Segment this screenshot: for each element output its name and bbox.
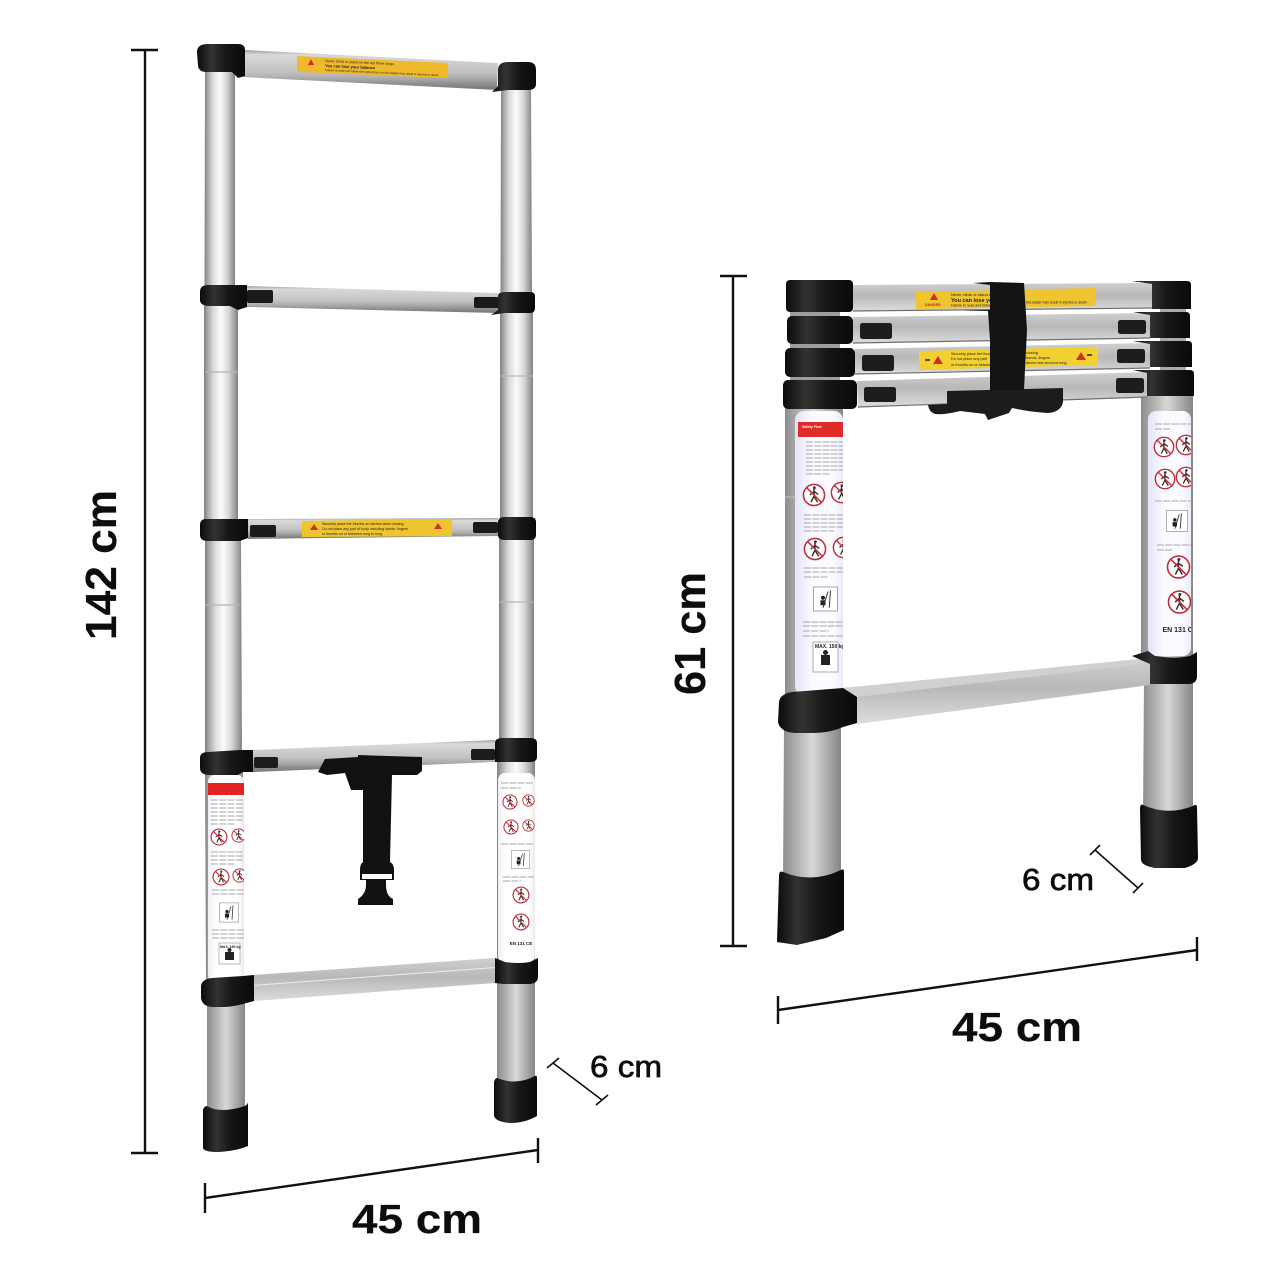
right stile bbox=[497, 85, 535, 1090]
strap and buckle bbox=[318, 755, 422, 905]
left collars bbox=[197, 44, 254, 1007]
lower left collar bbox=[778, 688, 857, 733]
middle warning label: Do not place any part bbox=[951, 357, 988, 361]
left sticker bbox=[795, 411, 843, 692]
dimension: depth 6 cm folded: 6 cm bbox=[1022, 862, 1094, 897]
middle warning label: closing bbox=[1026, 351, 1038, 355]
upper right stile bbox=[1141, 392, 1193, 657]
rung 3 with warning label: Securely place the thumbs on latches when closing bbox=[322, 522, 404, 526]
dimension: height 61 cm: 61 cm bbox=[666, 572, 715, 695]
stacked rungs bbox=[853, 283, 1152, 407]
right sticker bbox=[498, 773, 535, 963]
upper warning label: DANGER bbox=[925, 303, 941, 307]
extended ladder illustration bbox=[197, 44, 538, 1152]
rung 4 bbox=[253, 740, 495, 772]
left sticker: MAX. 150 kg bbox=[220, 945, 241, 949]
middle warning label: above last secured rung bbox=[1026, 361, 1067, 365]
dimension: height 61 cm bbox=[666, 276, 747, 946]
left sticker bbox=[208, 775, 246, 982]
lower right collar bbox=[1132, 651, 1197, 684]
upper warning label: Never climb or stand on bbox=[951, 292, 993, 297]
upper warning label: Failure to read and follow bbox=[951, 304, 992, 308]
middle warning label: Securely place the thumbs bbox=[951, 352, 996, 356]
left stacked caps bbox=[783, 280, 857, 409]
upper warning label: You can lose your balance bbox=[951, 298, 1020, 304]
right collars bbox=[491, 62, 538, 984]
rung 1 with warning label: Never climb or stand on the top three rungs bbox=[325, 59, 394, 66]
right sticker: EN 131 CE bbox=[1162, 627, 1198, 634]
rung 1 with warning label bbox=[243, 50, 498, 90]
strap and handle bbox=[928, 282, 1063, 420]
middle warning label: hands, fingers bbox=[1026, 356, 1050, 360]
middle warning label bbox=[919, 347, 1098, 370]
lower left stile bbox=[783, 728, 841, 885]
rung 5 bbox=[253, 958, 495, 1001]
rung 3 with warning label: or thumbs on or between rung to rung bbox=[322, 532, 382, 536]
lower rung bbox=[843, 658, 1150, 724]
left sticker: MAX. 150 kg bbox=[815, 644, 844, 650]
rung 2 bbox=[247, 286, 499, 313]
right foot bbox=[1140, 805, 1198, 868]
dimension: depth 6 cm folded bbox=[1022, 845, 1143, 897]
dimension: depth 6 cm extended bbox=[547, 1049, 662, 1105]
rung 1 with warning label: You can lose your balance bbox=[325, 63, 376, 70]
upper left stile bbox=[785, 405, 843, 700]
dimension: depth 6 cm extended: 6 cm bbox=[590, 1049, 662, 1084]
rubber feet bbox=[203, 1076, 537, 1152]
left foot bbox=[777, 869, 844, 945]
dimension: width 45 cm extended bbox=[205, 1138, 538, 1242]
rung 3 with warning label bbox=[248, 518, 498, 539]
rung 1 with warning label: Failure to read and follow the instructions on this ladder may result in injuries or death bbox=[325, 68, 439, 77]
right sticker: EN 131 CE bbox=[510, 941, 532, 946]
dimension: height 142 cm: 142 cm bbox=[77, 490, 126, 640]
upper warning label: this ladder may result in injuries or death bbox=[1026, 300, 1087, 304]
left sticker: Safety First bbox=[802, 425, 822, 429]
left stile bbox=[204, 70, 245, 1118]
rung 3 with warning label: Do not place any part of body including hands, fingers bbox=[322, 527, 408, 531]
middle warning label: or thumbs on or between bbox=[951, 363, 993, 367]
lower right stile bbox=[1143, 680, 1193, 820]
upper warning label bbox=[916, 288, 1095, 309]
buttons bbox=[860, 320, 1146, 402]
dimension: width 45 cm folded bbox=[778, 937, 1197, 1050]
dimension: width 45 cm extended: 45 cm bbox=[352, 1196, 482, 1242]
right sticker bbox=[1148, 411, 1191, 656]
dimension: height 142 cm bbox=[77, 50, 158, 1153]
right stacked caps bbox=[1132, 281, 1194, 396]
folded ladder illustration bbox=[777, 280, 1198, 945]
dimension: width 45 cm folded: 45 cm bbox=[952, 1004, 1082, 1050]
